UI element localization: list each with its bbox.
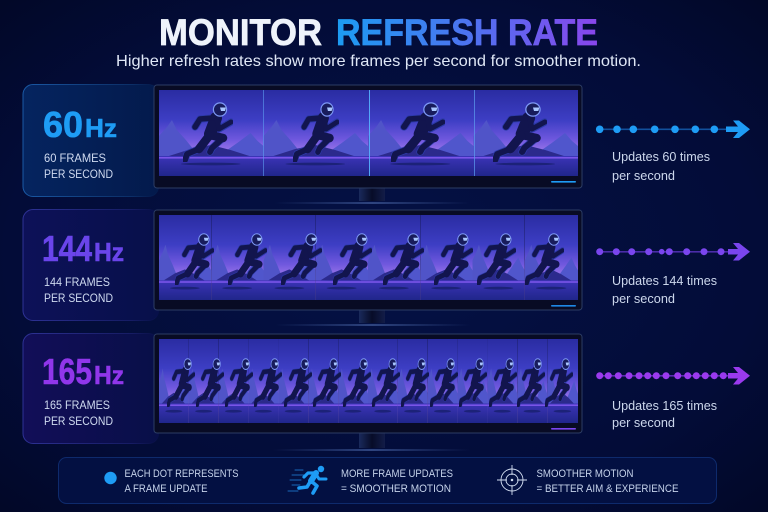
144Hz label card xyxy=(23,210,159,320)
icon: crosshair xyxy=(497,465,527,495)
monitor body xyxy=(154,85,582,188)
dot timeline 60Hz xyxy=(596,120,750,138)
60Hz value xyxy=(43,104,117,145)
144Hz update text: Updates 144 times xyxy=(612,274,717,288)
legend box xyxy=(58,458,716,504)
144Hz update text: per second xyxy=(612,292,675,306)
subtitle: Higher refresh rates show more frames per second for smoother motion. xyxy=(116,53,641,70)
dot timeline 144Hz xyxy=(596,243,750,260)
icon: frame dot xyxy=(104,472,117,484)
legend text: crosshair: = BETTER AIM & EXPERIENCE xyxy=(536,483,678,495)
60Hz caption: PER SECOND xyxy=(44,167,113,181)
legend xyxy=(58,458,716,504)
power indicator xyxy=(551,428,576,430)
60Hz caption: 60 FRAMES xyxy=(44,151,106,165)
60Hz value: 60 xyxy=(43,104,83,145)
icon: running figure xyxy=(288,466,326,493)
165Hz value: 165 xyxy=(42,351,92,392)
60Hz label card xyxy=(23,84,159,196)
title: REFRESH RATE xyxy=(336,12,598,53)
legend text: crosshair: SMOOTHER MOTION xyxy=(536,468,634,480)
legend text: dot: A FRAME UPDATE xyxy=(124,483,208,495)
165Hz update text xyxy=(612,399,717,430)
monitor body xyxy=(154,210,582,310)
165Hz value: Hz xyxy=(94,360,124,390)
165Hz caption: PER SECOND xyxy=(44,414,113,428)
legend text: runner: = SMOOTHER MOTION xyxy=(341,483,451,495)
60Hz caption xyxy=(44,151,113,181)
monitor screen: 8 frames xyxy=(159,215,578,300)
165Hz update text: per second xyxy=(612,416,675,430)
144Hz caption xyxy=(44,275,113,305)
dot timeline 165Hz xyxy=(596,367,750,384)
monitor body xyxy=(154,334,582,433)
monitor stand xyxy=(275,310,470,326)
60Hz value: Hz xyxy=(85,113,117,143)
power indicator xyxy=(551,305,576,307)
60Hz update text: per second xyxy=(612,169,675,183)
monitor stand xyxy=(273,433,470,451)
panel: 144Hz row xyxy=(23,210,750,326)
165Hz caption xyxy=(44,398,113,428)
panel: 165Hz row xyxy=(23,334,750,451)
165Hz caption: 165 FRAMES xyxy=(44,398,110,412)
monitor screen: 14 frames xyxy=(159,339,578,423)
legend text: dot: EACH DOT REPRESENTS xyxy=(124,468,238,480)
panel: 60Hz row xyxy=(23,84,750,204)
legend text: runner xyxy=(341,468,453,495)
144Hz caption: PER SECOND xyxy=(44,291,113,305)
legend text: dot xyxy=(124,468,238,495)
monitor stand xyxy=(275,188,470,204)
144Hz caption: 144 FRAMES xyxy=(44,275,110,289)
title xyxy=(159,12,598,53)
legend text: runner: MORE FRAME UPDATES xyxy=(341,468,453,480)
legend text: crosshair xyxy=(536,468,678,495)
title: MONITOR xyxy=(159,12,322,53)
60Hz update text: Updates 60 times xyxy=(612,150,710,164)
60Hz update text xyxy=(612,150,710,183)
165Hz label card xyxy=(23,334,159,444)
144Hz value: Hz xyxy=(94,237,124,267)
144Hz value: 144 xyxy=(42,228,92,269)
power indicator xyxy=(551,181,576,183)
144Hz update text xyxy=(612,274,717,306)
165Hz update text: Updates 165 times xyxy=(612,399,717,413)
monitor screen: 4 frames xyxy=(159,90,578,176)
